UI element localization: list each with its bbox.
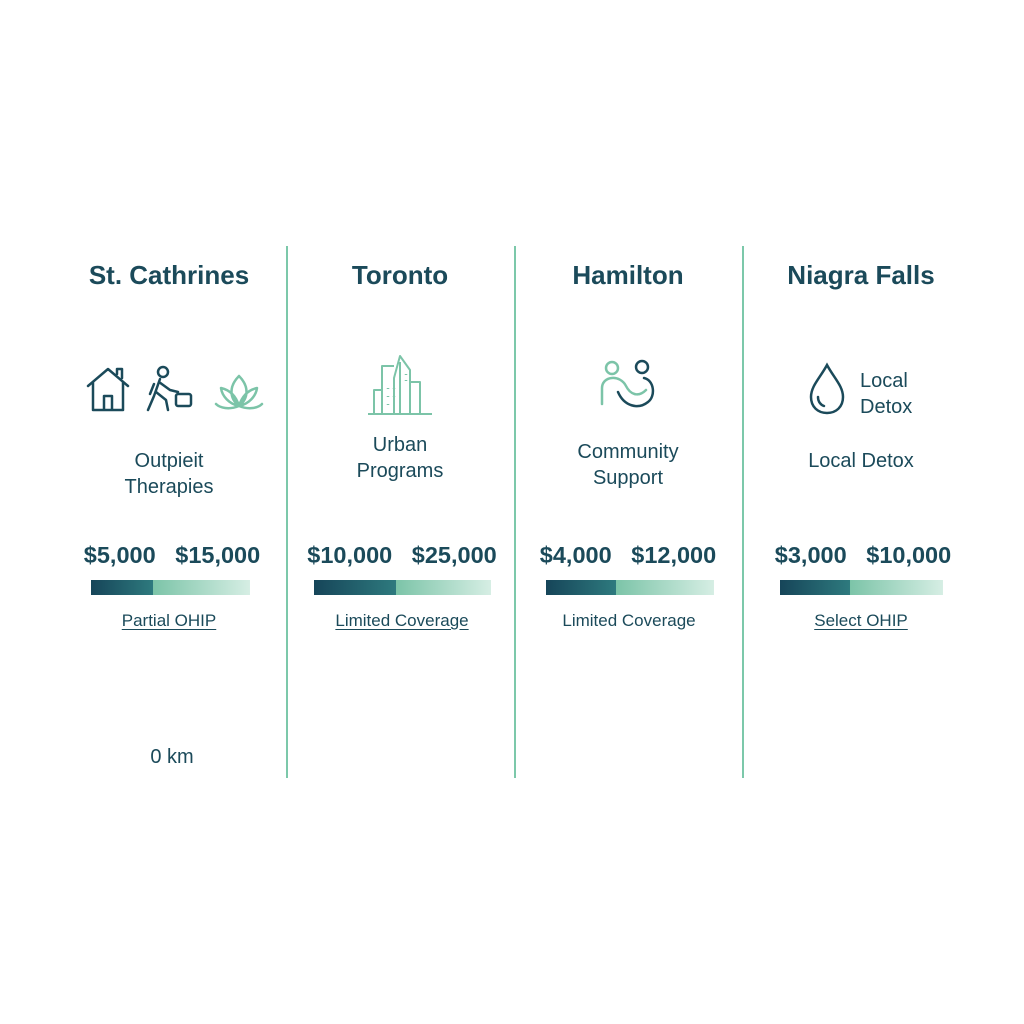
icons: house, walker, lotus — [86, 366, 264, 412]
icon: community support — [600, 360, 654, 408]
panel: Niagra Falls — [775, 260, 951, 630]
title: Hamilton: Hamilton — [572, 260, 684, 290]
title: St. Cathrines: St. Cathrines — [89, 260, 249, 290]
coverage: Limited Coverage — [562, 611, 696, 630]
label: Community Support: Support — [593, 467, 663, 489]
label: Local Detox (beside icon) — [860, 370, 912, 418]
icon: buildings — [368, 355, 432, 415]
coverage: Partial OHIP — [122, 611, 216, 630]
title: Niagra Falls: Niagra Falls — [787, 260, 935, 290]
prices: $10,000 $25,000 — [307, 542, 497, 568]
panel: Hamilton — [540, 260, 716, 630]
label: Urban Programs: Urban — [373, 434, 427, 456]
cost bar — [546, 580, 714, 595]
label: Urban Programs: Programs — [357, 460, 443, 482]
panel: St. Cathrines — [84, 260, 264, 768]
label: Outpieit Therapies: Therapies — [125, 476, 213, 498]
panel: Toronto — [307, 260, 497, 630]
distance: 0 km — [150, 746, 194, 768]
coverage: Limited Coverage — [335, 611, 469, 630]
label: Outpieit Therapies: Outpieit — [135, 450, 203, 472]
prices: $3,000 $10,000 — [775, 542, 951, 568]
title: Toronto: Toronto — [352, 260, 448, 290]
cost bar — [314, 580, 491, 595]
prices: $5,000 $15,000 — [84, 542, 260, 568]
prices: $4,000 $12,000 — [540, 542, 716, 568]
icon: water drop — [810, 362, 844, 414]
label: Outpieit Therapies — [124, 450, 213, 498]
label: Local Detox (beside icon): Detox — [860, 396, 912, 418]
cost bar — [91, 580, 250, 595]
label: Local Detox (beside icon): Local — [860, 370, 908, 392]
label: Local Detox: Local Detox — [808, 450, 914, 472]
label: Urban Programs — [357, 434, 443, 482]
label: Community Support — [577, 441, 679, 489]
cost bar — [780, 580, 943, 595]
coverage: Select OHIP — [814, 611, 908, 630]
label: Community Support: Community — [577, 441, 679, 463]
